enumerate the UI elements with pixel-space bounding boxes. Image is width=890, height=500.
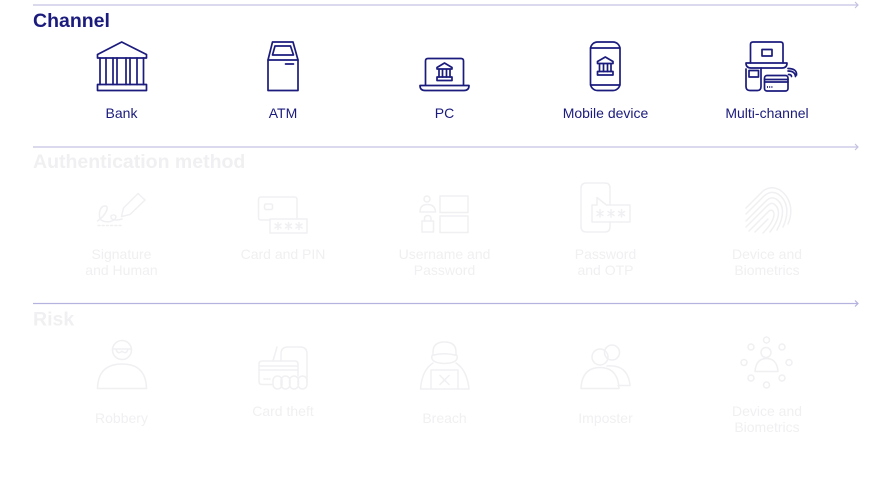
arrow: authentication — [33, 144, 858, 150]
label: Card and PIN: Card and PIN — [241, 246, 325, 262]
icon: multi-channel — [746, 42, 797, 91]
label: Bank: Bank — [106, 105, 138, 121]
heading: Channel: Channel — [33, 10, 110, 32]
label: Device and Biometrics: Biometrics — [734, 262, 800, 278]
label: Robbery: Robbery — [95, 410, 148, 426]
icon: password and OTP — [581, 183, 630, 232]
panel: risk — [33, 300, 858, 435]
label: Signature and Human: Signature — [92, 246, 151, 262]
icon: breach — [420, 342, 469, 389]
label: Device and Biometrics (risk): Device and — [732, 403, 802, 419]
arrow: risk — [33, 300, 858, 306]
icon: PC — [420, 58, 469, 90]
label: Password and OTP: Password — [575, 246, 636, 262]
icon: card theft — [259, 347, 307, 389]
label: Signature and Human: and Human — [85, 262, 158, 278]
label: Password and OTP: and OTP — [577, 262, 634, 278]
label: Imposter: Imposter — [578, 410, 633, 426]
label: Multi-channel: Multi-channel — [725, 105, 809, 121]
label: Device and Biometrics (risk): Biometrics — [734, 419, 800, 435]
label: ATM: ATM — [269, 105, 297, 121]
icon: bank — [98, 42, 146, 90]
icon: biometrics network — [741, 337, 792, 388]
icon: mobile device — [590, 42, 620, 90]
icon: robbery — [98, 340, 146, 388]
icon: signature — [98, 194, 145, 226]
label: PC: PC — [435, 105, 454, 121]
label: Breach: Breach — [422, 410, 467, 426]
panel: channel — [33, 2, 858, 121]
icon: ATM — [268, 42, 298, 90]
arrow: channel — [33, 2, 858, 8]
label: Username and Password: Username and — [399, 246, 490, 262]
label: Mobile device: Mobile device — [563, 105, 649, 121]
icon: fingerprint — [746, 188, 791, 233]
icon: username and password — [420, 196, 468, 232]
heading: Authentication method: Authentication method — [33, 151, 245, 173]
heading: Risk: Risk — [33, 308, 74, 330]
label: Card theft: Card theft — [252, 403, 314, 419]
panel: authentication method — [33, 144, 858, 278]
icon: card and PIN — [258, 197, 307, 233]
label: Username and Password: Password — [414, 262, 475, 278]
label: Device and Biometrics: Device and — [732, 246, 802, 262]
icon: imposter — [581, 345, 630, 388]
